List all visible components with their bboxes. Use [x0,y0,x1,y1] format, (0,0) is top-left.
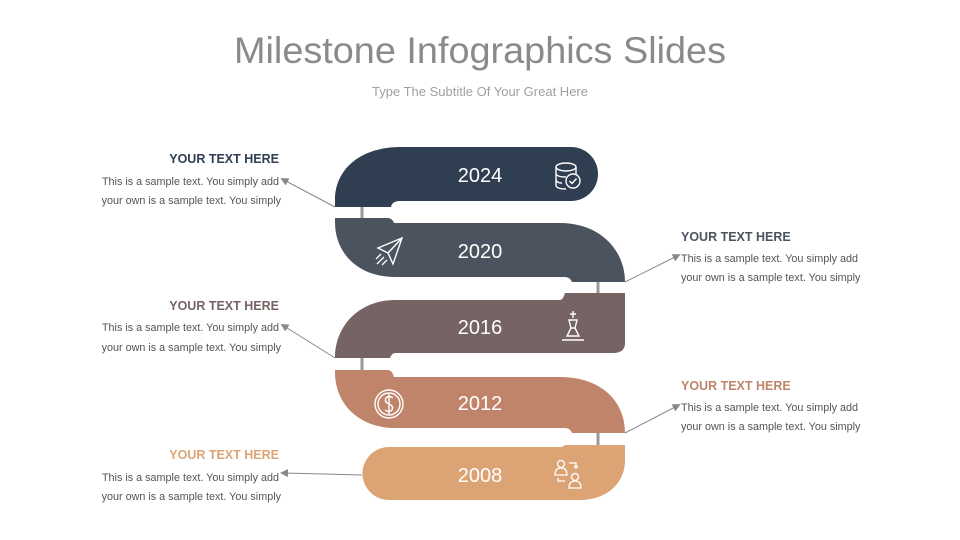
connectors [362,205,598,447]
text block: right 2: This is a sample text. You simply add [681,402,858,414]
text block: left 3: your own is a sample text. You simply [102,491,282,503]
band 2020 [335,218,625,282]
text block: left 3: This is a sample text. You simply add [102,472,279,484]
band 2020: 2020 [458,241,502,263]
text block: right 1: YOUR TEXT HERE [681,230,791,244]
band 2016: 2016 [458,317,502,339]
text block: left 2 [102,299,282,354]
text block: right 1: your own is a sample text. You simply [681,272,861,284]
icon: database check [556,163,580,189]
text block: left 2: This is a sample text. You simply add [102,322,279,334]
text block: left 2: YOUR TEXT HERE [169,299,279,313]
icon: chess king [562,311,584,340]
icon: people swap [555,460,581,488]
title: Milestone Infographics Slides [234,30,726,71]
band 2024 [335,147,598,207]
arrow left 2 [284,326,335,358]
text block: left 3: YOUR TEXT HERE [169,448,279,462]
icon: dollar [375,390,403,418]
band 2012 [335,370,625,433]
text block: left 1: your own is a sample text. You simply [102,195,282,207]
band 2012: 2012 [458,393,502,415]
arrow right 2 [625,406,677,433]
band 2024: 2024 [458,165,502,187]
text block: left 3 [102,448,282,503]
arrow left 1 [284,180,335,207]
text block: left 1: This is a sample text. You simply add [102,176,279,188]
band 2016 [335,293,625,358]
subtitle: Type The Subtitle Of Your Great Here [372,84,588,99]
text block: right 1 [681,230,861,284]
text block: left 2: your own is a sample text. You simply [102,342,282,354]
arrow right 1 [625,256,677,282]
text block: right 2 [681,379,861,433]
text block: left 1 [102,152,282,207]
band 2008: 2008 [458,465,502,487]
text block: right 2: YOUR TEXT HERE [681,379,791,393]
text block: right 2: your own is a sample text. You simply [681,421,861,433]
text block: left 1: YOUR TEXT HERE [169,152,279,166]
band 2008 [363,445,625,500]
arrow left 3 [284,473,362,475]
icon: paper plane [376,238,402,265]
text block: right 1: This is a sample text. You simply add [681,253,858,265]
